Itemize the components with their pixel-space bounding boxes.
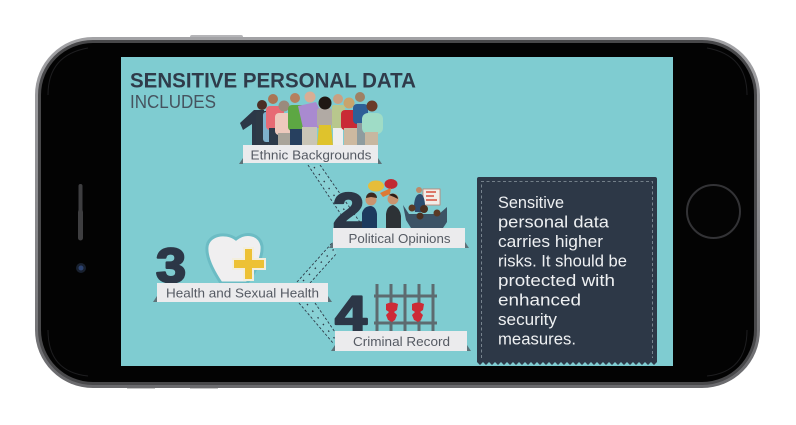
speaker slot [78, 184, 83, 241]
title: SENSITIVE PERSONAL DATA [130, 68, 416, 92]
callout text: protected with [498, 271, 615, 290]
callout text [498, 193, 627, 348]
banner: Health and Sexual Health [153, 283, 332, 302]
screen background [121, 57, 673, 366]
item 1: ethnic backgrounds [239, 92, 383, 164]
callout text: Sensitive [498, 193, 564, 212]
home button [687, 185, 740, 238]
item 3: health and sexual health [153, 235, 332, 302]
number 4: 4 [335, 286, 367, 342]
callout panel [477, 177, 657, 365]
icon: group of people [256, 92, 383, 146]
banner: Ethnic Backgrounds: Ethnic Backgrounds [250, 148, 372, 162]
icon: speech bubbles [368, 179, 398, 197]
banner: Political Opinions: Political Opinions [348, 232, 450, 246]
dashed connectors [297, 165, 364, 343]
callout text: carries higher [498, 232, 603, 251]
icon: two debaters [362, 192, 401, 228]
number 3: 3 [156, 240, 186, 293]
number 1 [240, 110, 264, 146]
banner: Ethnic Backgrounds [239, 145, 382, 164]
subtitle: INCLUDES [130, 92, 216, 112]
front camera [76, 263, 86, 273]
callout text: enhanced [498, 290, 581, 310]
banner: Health and Sexual Health: Health and Sexual Health [166, 286, 319, 300]
banner: Criminal Record: Criminal Record [353, 335, 450, 349]
callout text: measures. [498, 330, 576, 348]
item 4: criminal record [331, 284, 471, 351]
icon: heart with plus [207, 235, 265, 283]
number 2: 2 [333, 183, 364, 239]
item 2: political opinions [329, 179, 469, 248]
callout text: personal data [498, 212, 610, 232]
callout text: risks. It should be [498, 252, 627, 270]
callout text: security [498, 310, 557, 329]
icon: prison bars [374, 284, 437, 331]
icon: presentation audience [403, 187, 447, 228]
phone body [35, 35, 760, 389]
connector bands [297, 165, 364, 343]
